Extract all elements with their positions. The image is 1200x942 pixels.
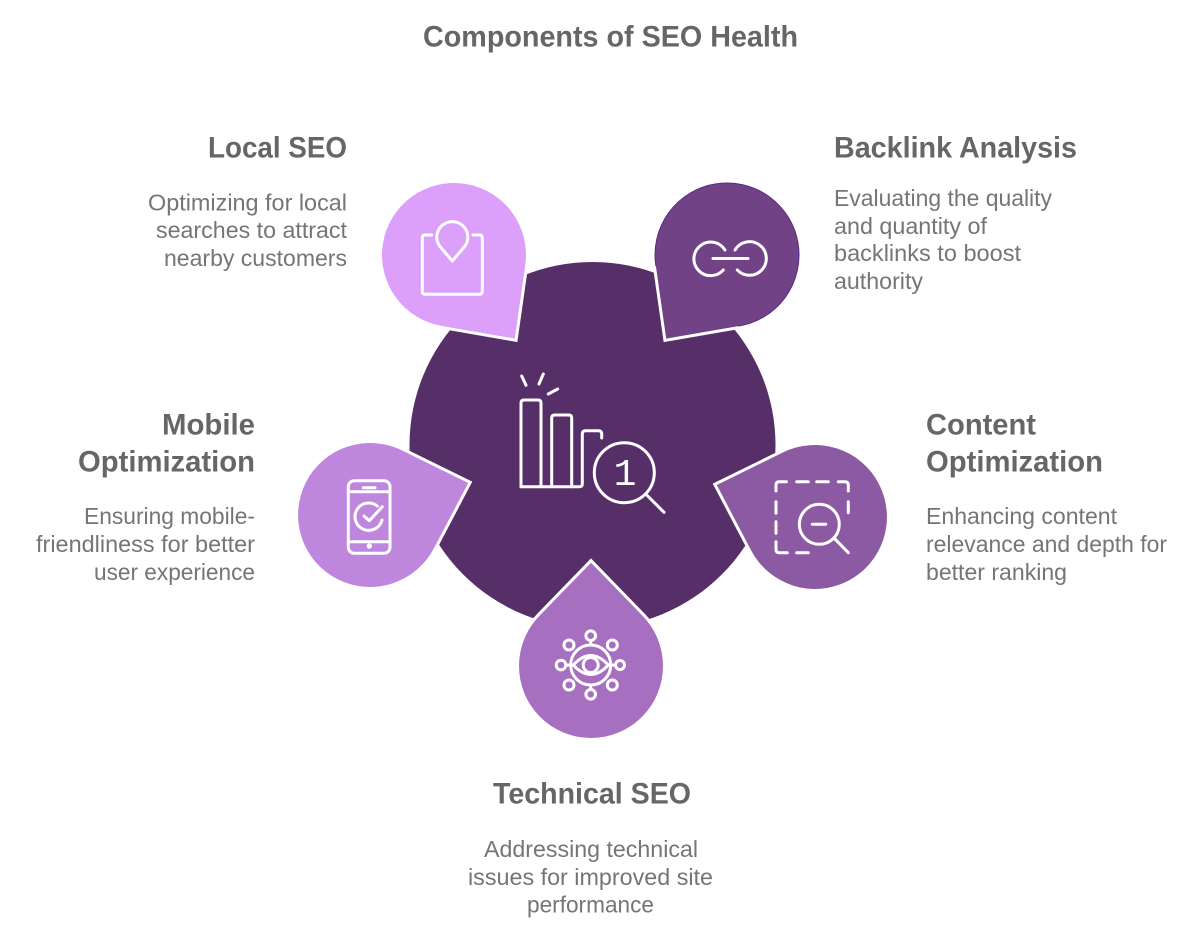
text block: content optimization: Enhancing content — [926, 503, 1118, 529]
text block: backlink analysis — [834, 185, 1052, 294]
text block: technical seo: Addressing technical — [484, 836, 698, 862]
heading: mobile optimization — [78, 408, 255, 478]
heading: backlink analysis: Backlink Analysis — [834, 132, 1077, 164]
text block: content optimization — [926, 503, 1167, 585]
text block: technical seo — [468, 836, 713, 918]
heading: local seo: Local SEO — [208, 132, 347, 164]
text block: backlink analysis: authority — [834, 268, 924, 294]
icon: bar chart with magnifier: 1 — [614, 454, 636, 497]
text block: mobile optimization: Ensuring mobile- — [84, 503, 255, 529]
heading: technical seo: Technical SEO — [493, 778, 691, 810]
panel: content optimization drop — [717, 445, 887, 589]
text block: content optimization: better ranking — [926, 559, 1067, 585]
text block: mobile optimization: user experience — [94, 559, 255, 585]
text block: backlink analysis: Evaluating the quality — [834, 185, 1052, 211]
heading: content optimization: Content — [926, 408, 1036, 442]
title: Components of SEO Health — [423, 20, 798, 54]
panel: backlink analysis drop — [655, 183, 799, 339]
text block: mobile optimization: friendliness for better — [36, 531, 255, 557]
text block: mobile optimization — [36, 503, 255, 585]
heading: mobile optimization: Optimization — [78, 446, 255, 478]
text block: backlink analysis: and quantity of — [834, 213, 988, 239]
text block: content optimization: relevance and depth for — [926, 531, 1167, 557]
icon: eye network — [556, 631, 624, 699]
panel: local seo drop — [382, 183, 526, 339]
text block: technical seo: performance — [527, 892, 654, 918]
panel: technical seo drop — [519, 563, 663, 738]
text block: local seo: searches to attract — [156, 217, 348, 243]
text block: local seo: nearby customers — [164, 245, 347, 271]
icon: smartphone with check — [348, 481, 390, 553]
text block: local seo: Optimizing for local — [148, 190, 347, 216]
icon: dashed frame with magnifier — [776, 482, 848, 553]
central circle — [410, 262, 776, 628]
text block: technical seo: issues for improved site — [468, 864, 713, 890]
panel: mobile optimization drop — [298, 443, 468, 587]
text block: backlink analysis: backlinks to boost — [834, 240, 1022, 266]
text block: local seo — [148, 190, 348, 271]
icon: map pin — [422, 222, 482, 294]
heading: mobile optimization: Mobile — [162, 408, 255, 442]
icon: bar chart with magnifier — [521, 374, 664, 512]
icon: chain link — [694, 242, 766, 276]
heading: content optimization — [926, 408, 1103, 478]
heading: content optimization: Optimization — [926, 446, 1103, 478]
